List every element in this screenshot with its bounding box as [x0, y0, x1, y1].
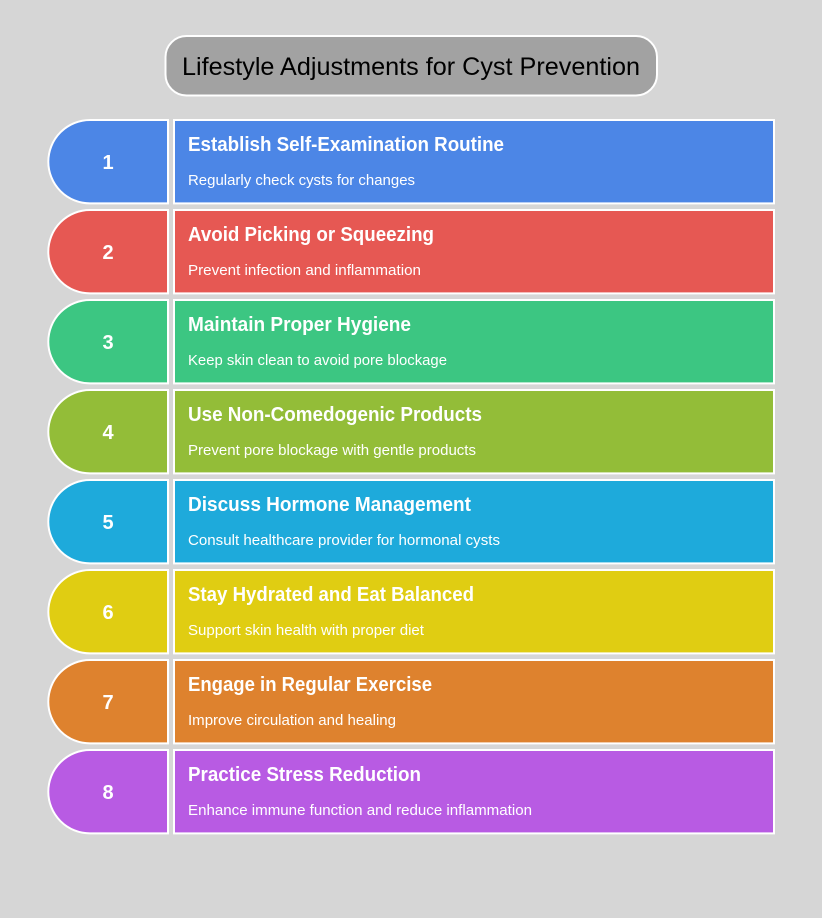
- step 4: [48, 390, 774, 473]
- step 3: 3: [102, 332, 114, 354]
- step 6: Support skin health with proper diet: [188, 623, 424, 639]
- step 7: Improve circulation and healing: [188, 713, 396, 729]
- step 2: Avoid Picking or Squeezing: [188, 224, 434, 246]
- step 1: Regularly check cysts for changes: [188, 173, 415, 189]
- step 5: 5: [102, 512, 114, 534]
- step 5: [48, 480, 774, 563]
- step 7: [48, 660, 774, 743]
- step 7: 7: [102, 692, 114, 714]
- step 4: Prevent pore blockage with gentle products: [188, 443, 476, 459]
- step 6: 6: [102, 602, 114, 624]
- title: [166, 36, 657, 96]
- step 8: 8: [102, 782, 114, 804]
- step 3: [48, 300, 774, 383]
- step 3: Keep skin clean to avoid pore blockage: [188, 353, 447, 369]
- step 2: 2: [102, 242, 114, 264]
- step 6: Stay Hydrated and Eat Balanced: [188, 584, 474, 606]
- step 2: [48, 210, 774, 293]
- step 8: Practice Stress Reduction: [188, 764, 421, 786]
- step 6: [48, 570, 774, 653]
- step 4: 4: [102, 422, 114, 444]
- step 1: 1: [102, 152, 114, 174]
- step 7: Engage in Regular Exercise: [188, 674, 432, 696]
- step 4: Use Non-Comedogenic Products: [188, 404, 482, 426]
- step 5: Discuss Hormone Management: [188, 494, 471, 516]
- step 1: Establish Self-Examination Routine: [188, 134, 504, 156]
- step 3: Maintain Proper Hygiene: [188, 314, 411, 336]
- step 5: Consult healthcare provider for hormonal cysts: [188, 533, 500, 549]
- step 8: [48, 750, 774, 833]
- step 2: Prevent infection and inflammation: [188, 263, 421, 279]
- step 8: Enhance immune function and reduce inflammation: [188, 803, 532, 819]
- title: Lifestyle Adjustments for Cyst Prevention: [182, 53, 640, 81]
- step 1: [48, 120, 774, 203]
